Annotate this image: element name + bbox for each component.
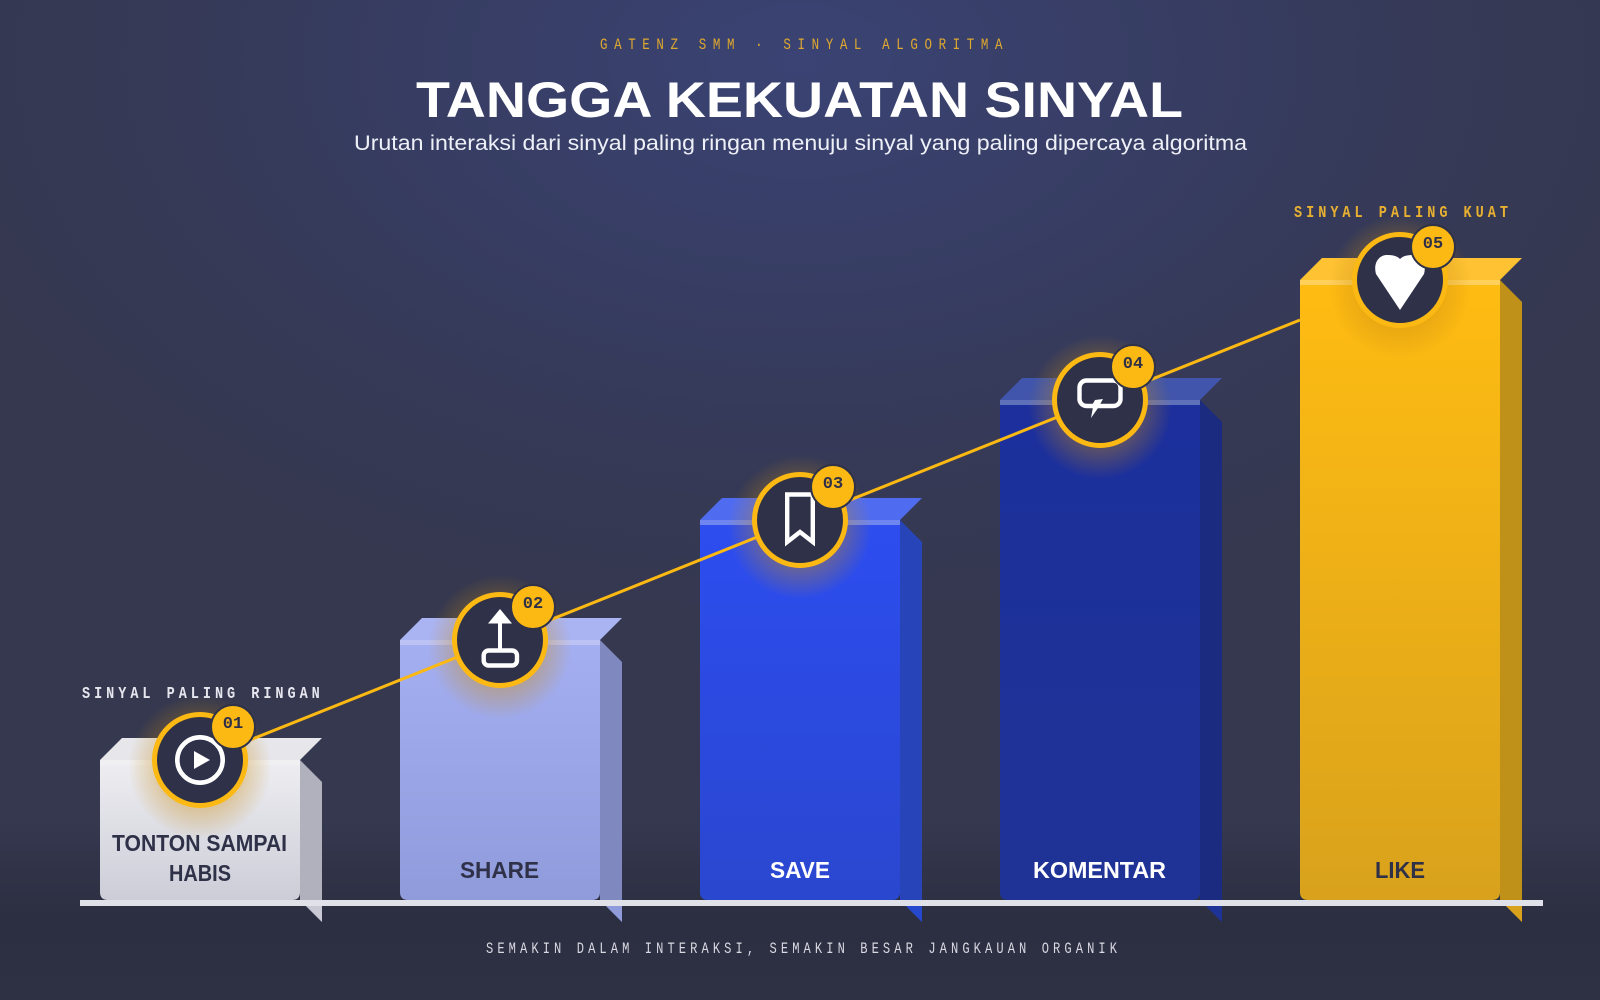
ground line: [80, 900, 1543, 906]
step 3 bar: [700, 498, 922, 922]
step 5 bar: [1300, 258, 1522, 922]
step 1 label: TONTON SAMPAI: [112, 830, 287, 856]
node 3: save: 03: [823, 475, 843, 494]
circle glows: [128, 215, 1472, 839]
strongest signal caption: SINYAL PALING KUAT: [1294, 203, 1508, 222]
icon: heart: [1375, 255, 1425, 310]
step 1 label: [112, 830, 287, 886]
step 2 label: SHARE: [460, 857, 539, 883]
node 4: comment: 04: [1123, 355, 1143, 374]
node 5: like: [1354, 225, 1455, 326]
icon: speech bubble: [1080, 380, 1120, 418]
kicker: GATENZ SMM · SINYAL ALGORITMA: [600, 37, 1003, 55]
subtitle: Urutan interaksi dari sinyal paling ringan menuju sinyal yang paling dipercaya algoritma: [354, 132, 1247, 155]
step 4 label: KOMENTAR: [1033, 857, 1166, 883]
step 2 bar: [400, 618, 622, 922]
title: TANGGA KEKUATAN SINYAL: [416, 72, 1183, 128]
rising connector line: [200, 320, 1300, 760]
step 4 bar: [1000, 378, 1222, 922]
node 2: share: 02: [523, 595, 543, 614]
icon: play: [177, 737, 223, 783]
footer note: SEMAKIN DALAM INTERAKSI, SEMAKIN BESAR JANGKAUAN ORGANIK: [486, 941, 1118, 959]
lightest signal caption: SINYAL PALING RINGAN: [82, 684, 320, 703]
step 5 label: LIKE: [1375, 857, 1425, 883]
step 3 label: SAVE: [770, 857, 830, 883]
node 4: comment: [1054, 345, 1155, 446]
icon: bookmark: [787, 494, 813, 542]
step 1 bar: [100, 738, 322, 922]
node 1: play: 01: [223, 715, 243, 734]
node 3: save: [754, 465, 855, 566]
step 1 label: HABIS: [169, 860, 231, 886]
node 1: play: [154, 705, 255, 806]
icon: share: [484, 609, 517, 666]
node 2: share: [454, 585, 555, 686]
node 5: like: 05: [1423, 235, 1443, 254]
